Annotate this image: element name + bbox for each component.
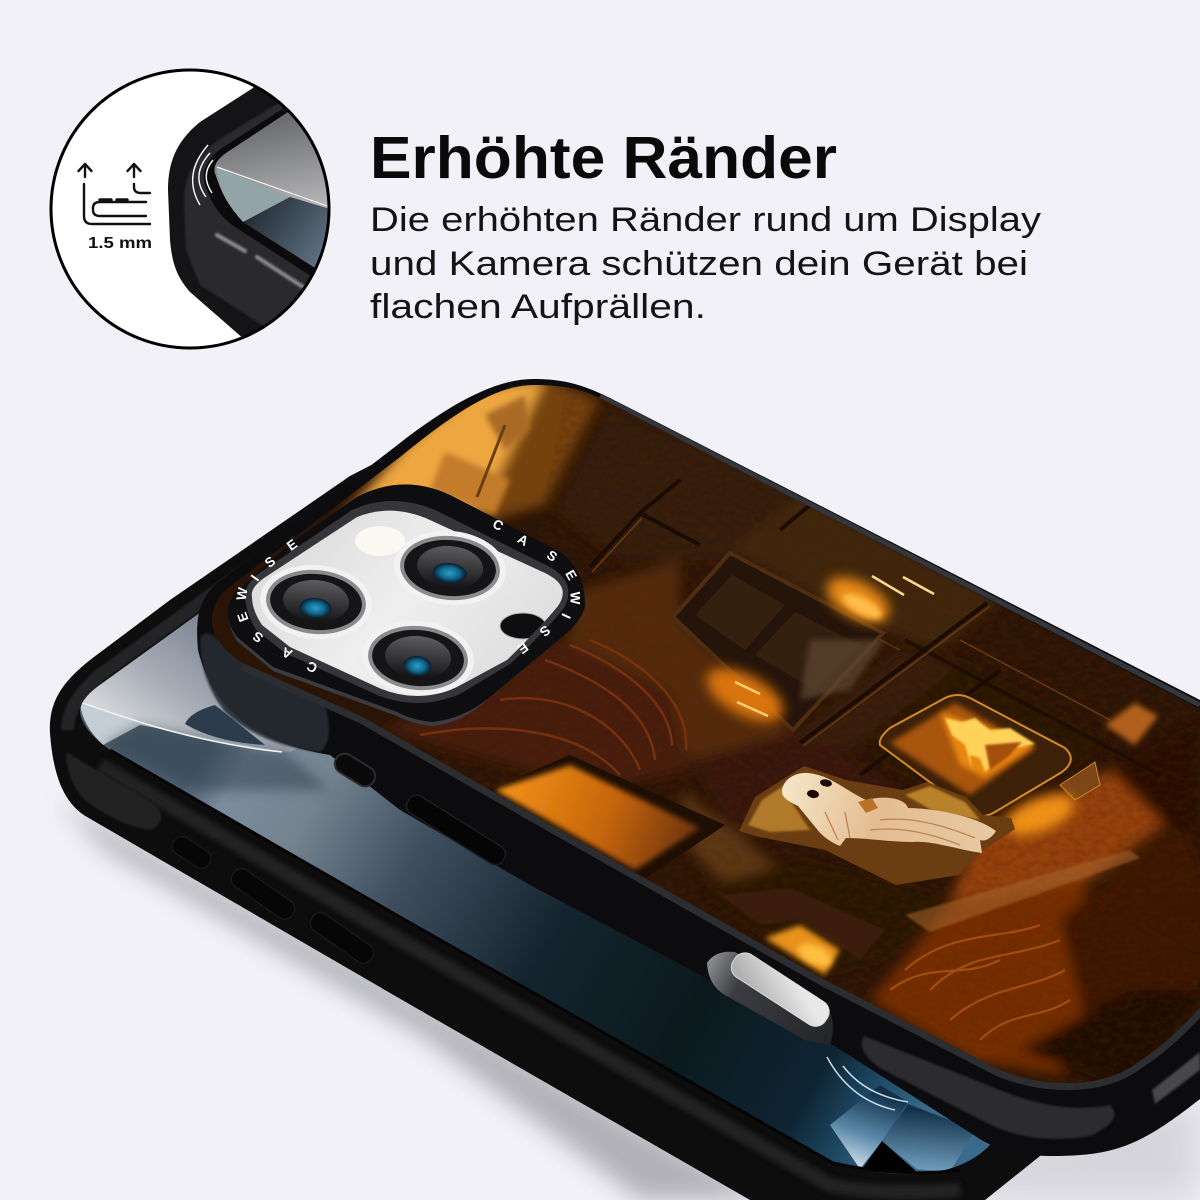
- pale wedge: [80, 703, 285, 752]
- sofa body: [739, 766, 1015, 885]
- ring lettering: S: [537, 622, 553, 640]
- lens left: [257, 560, 375, 644]
- zone: carpet: [870, 880, 1110, 1075]
- corner bumper patch: [66, 752, 161, 830]
- shadow under phones: [58, 800, 1200, 1200]
- close-up case body: [168, 70, 340, 360]
- artwork rim: [243, 663, 1200, 1083]
- fire chamber: [890, 703, 1035, 795]
- sofa arm highlight: [905, 786, 980, 820]
- ring lettering: [234, 516, 582, 676]
- zone: column: [475, 378, 600, 525]
- inset phone corner close-up: [168, 70, 340, 360]
- window panes: [696, 575, 850, 683]
- close-up case inner band: [184, 96, 340, 330]
- gray wallpaper region: [82, 614, 298, 752]
- ghost eye left: [806, 789, 820, 799]
- strip highlights: [872, 576, 934, 595]
- zone: upper dark panels: [555, 405, 800, 560]
- zone: wall: [560, 560, 800, 780]
- button volume down: [307, 909, 377, 967]
- impact arcs: [193, 145, 213, 205]
- camera window: [252, 511, 563, 696]
- ring lettering: I: [248, 572, 262, 584]
- flame base: [940, 712, 1035, 778]
- zone: wall lower: [680, 790, 790, 880]
- sofa: [739, 766, 1015, 885]
- camera window contents: [355, 526, 546, 639]
- zone: lower dark panel: [700, 860, 960, 975]
- lens top: [391, 526, 509, 610]
- ring lower bevel: [228, 484, 585, 726]
- black triangle: [860, 1141, 917, 1172]
- ghost sheet folds: [825, 812, 975, 845]
- ring lettering: I: [558, 611, 574, 621]
- upper rim: [600, 396, 1200, 705]
- lower fire frame: [720, 888, 885, 960]
- glow lower: [699, 658, 791, 732]
- screen gradient: [80, 614, 990, 1174]
- zone: curtain: [380, 640, 690, 790]
- core glow: [839, 589, 885, 623]
- close-up pale wedge: [216, 167, 290, 222]
- upper right glow: [1105, 703, 1158, 745]
- zone: bright left: [340, 378, 550, 520]
- zone: ornate panel: [790, 650, 960, 750]
- strips lower: [735, 682, 768, 716]
- zone: top band: [730, 495, 1000, 650]
- fireplace frame: [488, 755, 725, 882]
- microphone cutout: [500, 613, 546, 639]
- thickness label: 1.5 mm: [88, 235, 152, 252]
- description text: [370, 201, 1041, 326]
- lower fire core: [795, 939, 835, 971]
- silver button: [727, 948, 834, 1031]
- flame log: [985, 742, 1022, 770]
- ring lettering: W: [234, 586, 251, 602]
- case body back: [197, 379, 1200, 1156]
- ring lettering: E: [515, 639, 531, 657]
- close-up gray screen: [214, 100, 340, 270]
- ring lettering: S: [544, 547, 560, 565]
- white curve: [80, 702, 282, 752]
- ring lettering: C: [304, 658, 320, 676]
- inset outline: [51, 70, 329, 348]
- button volume up: [228, 865, 298, 923]
- mute switch: [331, 750, 379, 790]
- soft colour zones: [340, 378, 1200, 1090]
- glow upper: [820, 568, 896, 632]
- zone: wood floor: [950, 770, 1170, 910]
- painted grain: [400, 370, 1200, 1100]
- ring lettering: W: [568, 592, 582, 605]
- close-up highlights: [217, 235, 303, 287]
- beam highlights: [592, 518, 1110, 746]
- teacup: [858, 798, 878, 813]
- ghost body: [782, 773, 996, 853]
- ring outer: [228, 484, 585, 722]
- column shadow line: [477, 425, 505, 497]
- camera ring: [228, 484, 585, 726]
- artwork: haunted parlour with ghost: [200, 370, 1200, 1100]
- ring lettering: E: [562, 567, 580, 583]
- zone: bottom dark corner: [1020, 990, 1200, 1090]
- bottom corner patch: [862, 1036, 1114, 1139]
- case rim highlight: [68, 498, 345, 730]
- flame core: [945, 718, 1035, 772]
- close-up black lip: [204, 100, 340, 282]
- phone screen: [80, 614, 990, 1174]
- curtain folds: [420, 640, 686, 775]
- wall lamp lower: [699, 658, 791, 732]
- ring lettering: S: [250, 628, 266, 646]
- floor glow: [1001, 787, 1079, 843]
- fire surround frame: [880, 695, 1071, 816]
- dark blob: [185, 705, 265, 745]
- description text: Die erhöhten Ränder rund um Display: [370, 201, 1041, 239]
- dark screen edge: [110, 750, 960, 1173]
- blue reflection left: [830, 1085, 908, 1169]
- description text: und Kamera schützen dein Gerät bei: [370, 245, 1028, 283]
- light arcs: [827, 1057, 908, 1110]
- zone: lower left panel: [690, 730, 900, 840]
- button power: [169, 833, 215, 872]
- close-up white line: [217, 167, 330, 207]
- beams: [590, 480, 1160, 775]
- heading: Erhöhte Ränder: [370, 125, 837, 191]
- blue reflection right: [882, 1104, 975, 1172]
- ghost: [782, 773, 996, 853]
- rim along lower edge: [100, 765, 960, 1192]
- carpet pattern: [890, 925, 1070, 1040]
- ghost eye right: [819, 778, 833, 788]
- zone: floor right: [1060, 820, 1200, 1080]
- raised edge icon: [78, 164, 150, 224]
- bright wall blocks: [429, 394, 532, 518]
- side table: [1060, 762, 1100, 800]
- dark wallpaper band: [103, 725, 330, 790]
- carpet border: [905, 850, 1140, 932]
- metal port strip: [1152, 1052, 1200, 1104]
- ring inner bevel: [245, 501, 568, 703]
- ring lettering: S: [262, 553, 278, 571]
- translucent corner patch: [200, 633, 329, 752]
- circular detail inset: [51, 70, 340, 360]
- ring lettering: A: [515, 531, 531, 549]
- ring lettering: A: [279, 644, 295, 662]
- close-up dark area: [243, 197, 340, 280]
- side button: [403, 792, 509, 868]
- wall lamp upper: [820, 568, 934, 632]
- fireplace glow: [495, 765, 700, 870]
- lens bottom: [359, 616, 477, 700]
- artwork base: [200, 370, 1200, 1100]
- lower fire glow: [765, 925, 840, 975]
- zone: right wall: [1110, 720, 1200, 830]
- description text: flachen Aufprällen.: [370, 288, 706, 326]
- window frame: [673, 553, 885, 730]
- ring lettering: E: [284, 536, 300, 554]
- lower fire: [720, 888, 885, 975]
- lower phone case: [50, 440, 1060, 1200]
- main fireplace: [880, 695, 1071, 816]
- glow block: [1105, 703, 1158, 745]
- case body front: [50, 440, 1060, 1200]
- sofa highlight: [748, 775, 810, 832]
- ring lettering: E: [234, 610, 252, 624]
- window pale reflection: [800, 640, 885, 700]
- silver button housing: [707, 952, 833, 1045]
- inset disc: [51, 70, 329, 348]
- window body: [673, 553, 883, 730]
- upper phone case with artwork: [197, 379, 1200, 1156]
- zone: fire surround: [874, 669, 1014, 818]
- flash: [355, 526, 405, 556]
- ring lettering: C: [490, 516, 506, 534]
- lower left fireplace: [488, 755, 725, 882]
